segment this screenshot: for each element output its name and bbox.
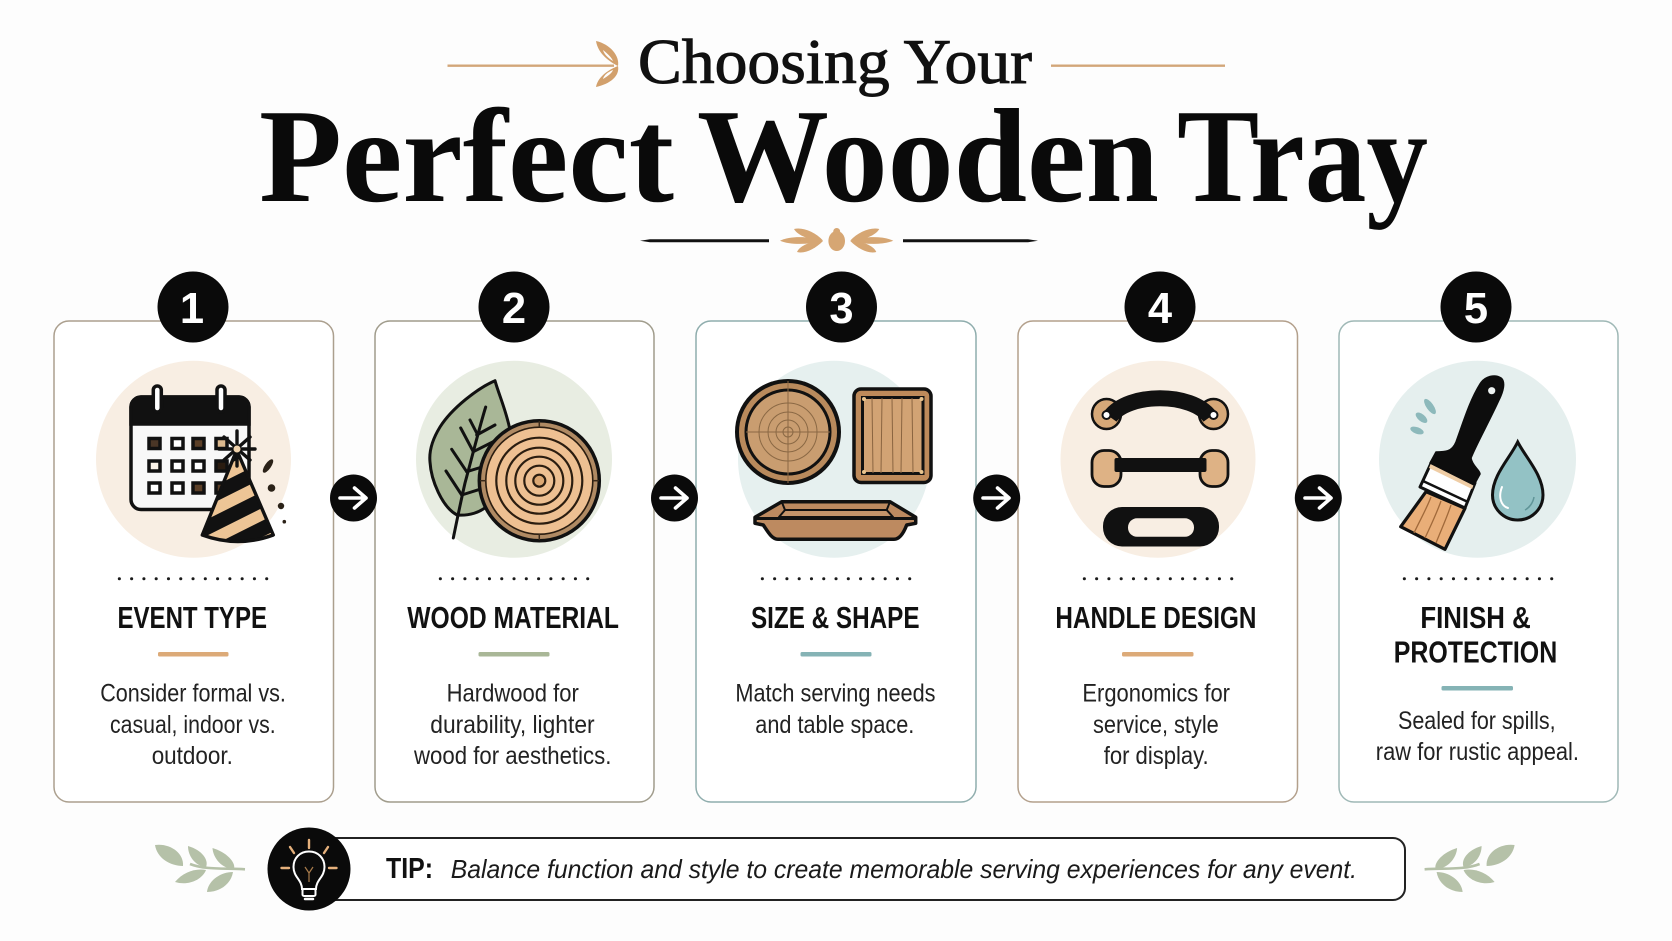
title: Perfect Wooden Tray: Tray [1177,82,1428,230]
icon: wood slice [479,421,599,541]
description: durability, lighter [430,712,595,739]
title: Perfect Wooden Tray: Perfect [259,82,674,230]
dotted divider [1404,577,1552,580]
step number 1: 1 [180,285,204,333]
panel: handle design [1018,321,1298,802]
step number 4 [1124,272,1196,342]
tip text: Balance function and style to create memorable serving experiences for any event. [451,856,1357,884]
tip bar [320,838,1405,900]
icon: rectangular tray [854,389,931,482]
accent bar [1122,652,1194,656]
heading [1394,600,1557,669]
dotted divider [1084,577,1232,580]
description [1082,680,1230,770]
step number 3: 3 [829,285,854,333]
description: Hardwood for [447,680,579,708]
step number 2 [478,272,550,342]
description: casual, indoor vs. [110,712,276,739]
heading: SIZE & SHAPE [751,600,920,635]
arrow 2 to 3 [651,474,698,522]
dotted divider [119,577,267,580]
title: Choosing Your: Choosing Your [638,26,1032,97]
step number 4: 4 [1148,285,1172,333]
accent bar [800,652,872,656]
tip label: TIP: [386,853,433,885]
ornament: divider under title [640,228,1038,252]
ornament: arrow with leaves left of subtitle [448,41,618,87]
icon: calendar [131,386,249,510]
icon: splash marks [1409,397,1438,436]
accent bar [158,652,228,656]
panel: wood material [375,321,654,802]
icon: side view tray [755,502,916,539]
heading: EVENT TYPE [118,600,267,635]
title: Perfect Wooden Tray [259,82,1428,230]
icon: bar handle [1092,450,1228,486]
description: Consider formal vs. [100,680,286,708]
step number 5 [1440,272,1512,342]
icon: paint brush [1401,376,1504,549]
description: Sealed for spills, [1398,708,1556,735]
title: Perfect Wooden Tray: Wooden [697,82,1159,230]
leaf sprig left [155,845,245,892]
step number 1 [158,272,228,342]
icon: party hat [200,429,286,544]
ornament: right subtitle line [1051,64,1225,67]
arrow 1 to 2 [330,474,377,522]
accent bar [478,652,550,656]
description [100,680,286,770]
description: and table space. [755,712,914,739]
description: Match serving needs [735,680,936,708]
description [1376,708,1579,766]
description: raw for rustic appeal. [1376,739,1579,766]
step number 3 [806,272,877,342]
heading: PROTECTION [1394,634,1557,669]
panel: event type [54,321,334,802]
icon: arched handle [1092,398,1228,429]
icon: round tray [737,381,839,483]
panel: finish and protection [1339,321,1618,802]
description: outdoor. [152,743,233,770]
panel: size and shape [696,321,976,802]
description: Ergonomics for [1082,680,1230,708]
accent bar [1442,686,1513,690]
arrow 4 to 5 [1295,474,1342,522]
icon backdrop circle [1060,361,1256,558]
dotted divider [762,577,910,580]
dotted divider [440,577,588,580]
leaf sprig right [1425,845,1515,892]
icon backdrop circle [1379,361,1576,558]
step number 5: 5 [1464,285,1488,333]
heading: HANDLE DESIGN [1055,600,1256,635]
heading: FINISH & [1420,600,1531,635]
icon: leaf [430,381,510,538]
description: for display. [1104,743,1209,770]
icon: water drop [1492,442,1543,520]
description: wood for aesthetics. [413,743,611,770]
step number 2: 2 [502,285,526,333]
heading: WOOD MATERIAL [407,600,619,635]
icon backdrop circle [738,361,930,558]
icon: cutout handle [1103,507,1219,546]
icon backdrop circle [416,361,612,558]
icon: light bulb [268,828,350,910]
description [735,680,936,739]
icon backdrop circle [96,361,291,558]
description: service, style [1093,712,1219,739]
arrow 3 to 4 [973,474,1020,522]
description [413,680,611,770]
